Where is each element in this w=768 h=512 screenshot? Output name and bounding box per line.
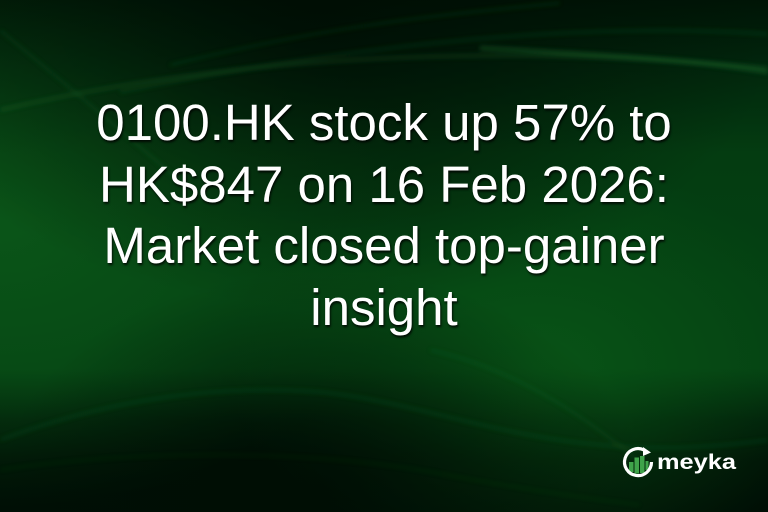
- title: 0100.HK stock up 57% to: [96, 94, 672, 151]
- logo: meyka: [622, 446, 736, 478]
- title: Market closed top-gainer: [103, 217, 665, 274]
- wordmark: meyka: [657, 451, 736, 474]
- title: insight: [310, 278, 458, 336]
- icon: circular arrow with bars: [625, 447, 652, 476]
- title: [96, 94, 672, 338]
- title: HK$847 on 16 Feb 2026:: [99, 156, 669, 212]
